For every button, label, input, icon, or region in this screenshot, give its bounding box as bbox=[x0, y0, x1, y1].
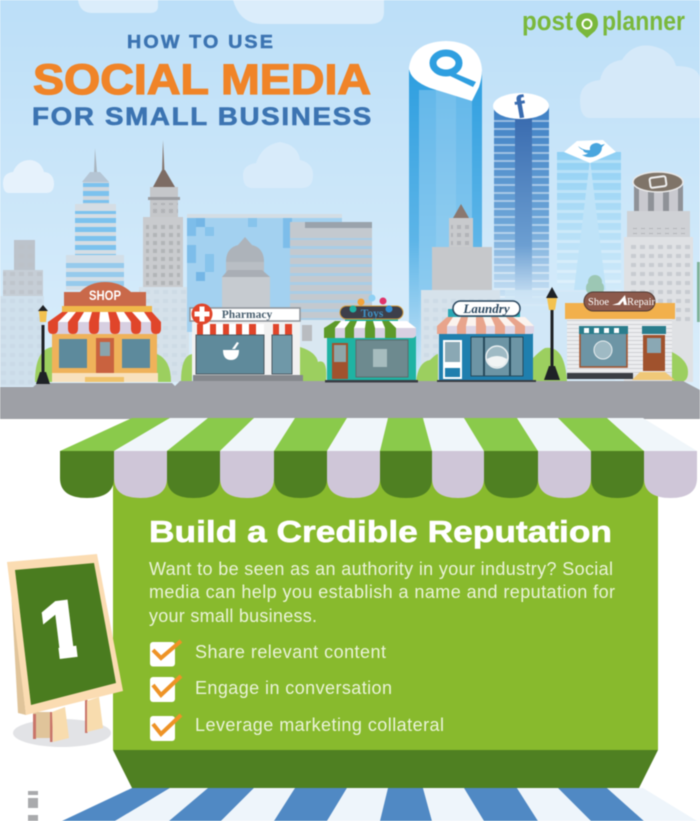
storefront: laundry bbox=[437, 301, 536, 382]
sign: Toys bbox=[361, 308, 384, 320]
logo: post planner: planner bbox=[602, 6, 685, 36]
logo: post planner bbox=[522, 6, 685, 38]
storefront: shop bbox=[48, 282, 161, 382]
skyscraper: twitter bbox=[557, 140, 621, 292]
sign bbox=[584, 292, 655, 311]
sign: SHOP bbox=[89, 288, 121, 303]
skyscraper: facebook: f bbox=[512, 88, 529, 126]
heading: Build a Credible Reputation bbox=[149, 514, 612, 549]
dashed path marker bbox=[28, 791, 38, 821]
white lower section bbox=[0, 419, 700, 821]
numeral: 1 bbox=[35, 583, 90, 676]
title bbox=[32, 31, 373, 131]
panel base bbox=[113, 750, 658, 788]
road bbox=[0, 381, 700, 419]
background skyline left bbox=[0, 140, 372, 386]
skyscraper: instagram bbox=[624, 172, 700, 382]
bushes bbox=[35, 347, 688, 382]
panel: build a credible reputation bbox=[113, 450, 658, 788]
striped office building bbox=[290, 222, 372, 382]
panel body bbox=[113, 450, 658, 750]
domed building bbox=[222, 237, 270, 327]
checklist item 1 bbox=[150, 641, 386, 666]
storefront: toys bbox=[324, 294, 418, 382]
sign: Pharmacy bbox=[222, 309, 272, 321]
awning bbox=[437, 317, 534, 334]
sign: Laundry bbox=[462, 301, 510, 316]
checklist item 3 bbox=[150, 715, 444, 741]
checklist item 3: Leverage marketing collateral bbox=[195, 715, 444, 735]
title: SOCIAL MEDIA bbox=[33, 56, 371, 104]
rooftop logo bbox=[409, 41, 482, 101]
storefront: shoe repair bbox=[565, 292, 675, 380]
clouds bbox=[3, 0, 700, 193]
green awning bbox=[60, 418, 697, 498]
icon: red cross bbox=[192, 304, 212, 324]
body text: your small business. bbox=[149, 606, 317, 626]
checklist item 1: Share relevant content bbox=[195, 642, 386, 662]
lamp post left bbox=[36, 305, 50, 384]
gray clock tower bbox=[139, 140, 189, 382]
next section awning: blue stripes bbox=[62, 788, 697, 821]
awning bbox=[324, 321, 416, 338]
skyscraper: facebook bbox=[493, 88, 549, 306]
far left gray building bbox=[0, 240, 44, 386]
checklist item 2 bbox=[150, 676, 392, 702]
awning canopy bbox=[60, 418, 697, 451]
glass building bbox=[187, 214, 342, 332]
awning bbox=[48, 312, 161, 334]
icon: bird bbox=[578, 143, 605, 157]
logo: post planner: post bbox=[522, 6, 573, 36]
background sky bbox=[0, 0, 700, 392]
awning valance bbox=[60, 451, 697, 498]
skyscraper: post planner bbox=[409, 41, 482, 380]
body text: Want to be seen as an authority in your industry? Social bbox=[149, 559, 613, 579]
storefront: pharmacy bbox=[190, 304, 312, 381]
body text: media can help you establish a name and reputation for bbox=[149, 582, 615, 602]
title: FOR SMALL BUSINESS bbox=[32, 103, 373, 131]
sign: Repair bbox=[627, 297, 655, 308]
sign: Shoe bbox=[588, 297, 609, 308]
icon: mortar and pestle bbox=[223, 342, 239, 360]
checklist item 2: Engage in conversation bbox=[195, 678, 392, 698]
mid gray building bbox=[421, 204, 615, 382]
sandwich board sign: number 1 bbox=[7, 554, 123, 747]
lamp post right bbox=[544, 287, 560, 380]
body text bbox=[149, 559, 615, 626]
icon: location pin bbox=[576, 13, 598, 38]
title: HOW TO USE bbox=[127, 31, 275, 52]
blue tower bbox=[66, 148, 124, 290]
